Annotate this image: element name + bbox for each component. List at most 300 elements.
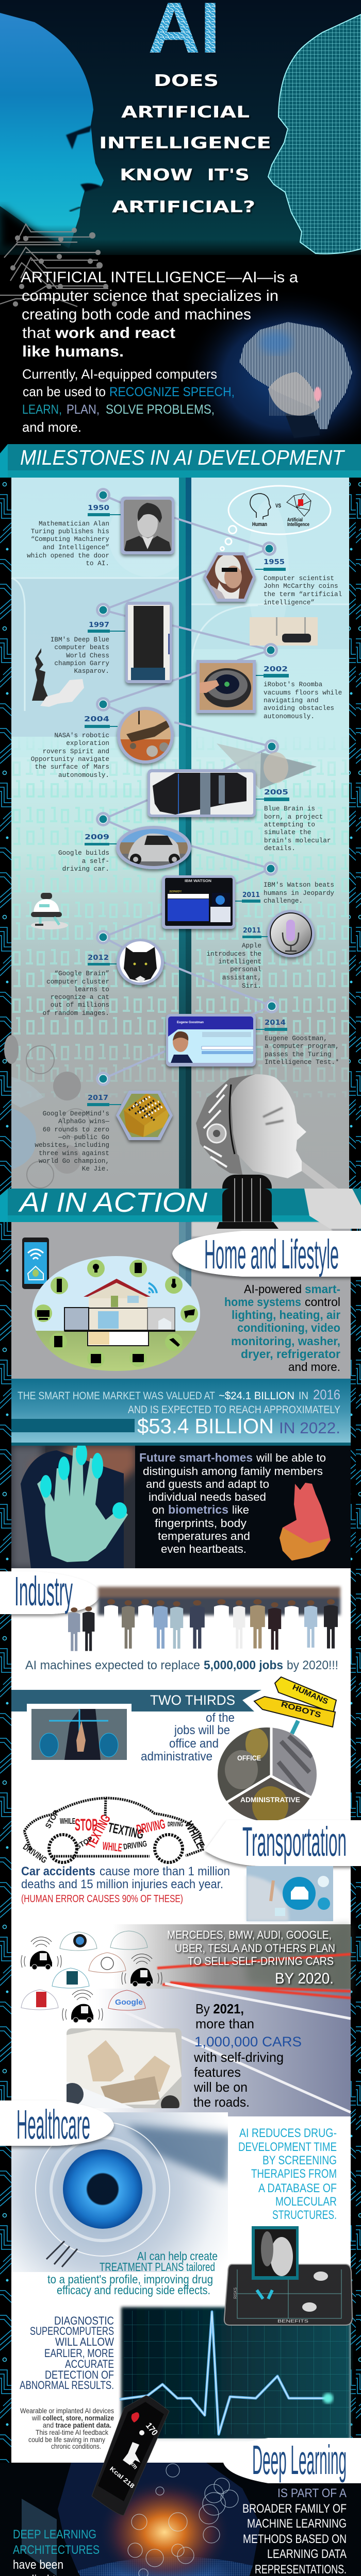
device icons bbox=[35, 1260, 198, 1367]
year: 2011 bbox=[242, 891, 260, 899]
title: DOES bbox=[154, 72, 219, 90]
connector lines bbox=[103, 495, 272, 1079]
tablet with risk benefit chart: RISKS bbox=[233, 2287, 238, 2299]
text: smart home systems: home systems bbox=[224, 1295, 301, 1309]
panel: smart home market: IN 2022. bbox=[279, 1419, 340, 1437]
bar bbox=[235, 900, 260, 903]
year: 2004 bbox=[84, 716, 109, 723]
item: 2014 Eugene Goostman bbox=[166, 999, 339, 1066]
text bbox=[31, 732, 109, 779]
title: ARTIFICIAL? bbox=[112, 198, 255, 216]
illustration: texting while driving word car: STOP bbox=[44, 1809, 61, 1830]
heading: milestones banner bbox=[0, 444, 361, 478]
text: of random images. bbox=[43, 1009, 109, 1017]
text: future smart homes: even heartbeats. bbox=[161, 1543, 247, 1555]
photo: black cat bbox=[117, 939, 164, 985]
text: out of millions bbox=[51, 1001, 109, 1009]
text: wearable devices: This real-time AI feedback bbox=[36, 2428, 109, 2436]
photo: John McCarthy bbox=[203, 552, 256, 602]
text: a self- bbox=[82, 857, 109, 865]
heading: Industry: Industry bbox=[14, 1568, 73, 1614]
text: Computer scientist bbox=[264, 574, 334, 582]
text: the term “artificial bbox=[264, 590, 342, 598]
text: smart home systems: and more. bbox=[288, 1360, 340, 1374]
text: Kasparov. bbox=[74, 667, 109, 675]
text: iRobot's Roomba bbox=[264, 681, 323, 688]
dot bbox=[262, 541, 276, 556]
text: brain's molecular bbox=[264, 837, 331, 844]
bar bbox=[256, 798, 289, 801]
text: car accidents: deaths and 15 million injuries each year. bbox=[21, 1877, 223, 1891]
text bbox=[27, 520, 109, 567]
panel: smart home market: THE SMART HOME MARKET WAS VALUED AT bbox=[18, 1390, 215, 1402]
panel: deep learning bbox=[0, 2396, 361, 2576]
decorative circles bbox=[4, 1035, 90, 1188]
dot bbox=[265, 739, 279, 754]
text: one million cars: will be on bbox=[193, 2079, 248, 2095]
logos: car brands: Google bbox=[115, 1998, 143, 2007]
screenshot: Eugene Goostman chatbot bbox=[166, 1014, 256, 1066]
bubbles bbox=[128, 2464, 238, 2576]
bar bbox=[255, 568, 286, 571]
text: drug development: A DATABASE OF bbox=[258, 2181, 337, 2195]
text: autonomously. bbox=[264, 713, 315, 720]
icon: code and face triangle bbox=[217, 743, 317, 789]
human versus AI labels: VS bbox=[275, 503, 281, 509]
panel: home and lifestyle bbox=[11, 1189, 361, 1379]
icon: fitness wristband bbox=[92, 2396, 169, 2515]
title: ARTIFICIAL bbox=[121, 103, 250, 122]
bar bbox=[256, 1028, 287, 1031]
text: to AI. bbox=[86, 560, 109, 567]
panel: self-driving road bbox=[11, 1924, 351, 2116]
illustration: anatomical heart bbox=[280, 1483, 331, 1561]
icon: wireframe head profile bbox=[268, 14, 361, 254]
heading band: two thirds: TWO THIRDS bbox=[150, 1692, 235, 1708]
text: future smart homes: individual needs based bbox=[149, 1490, 266, 1503]
year: 1950 bbox=[88, 504, 109, 512]
text: details. bbox=[264, 844, 296, 852]
bar bbox=[85, 725, 118, 728]
text: world Go champion, bbox=[39, 1157, 109, 1165]
text: wearable devices: chronic conditions. bbox=[51, 2442, 101, 2450]
text: one million cars: By 2021, bbox=[195, 2001, 244, 2016]
pie chart: job types: ADMINISTRATIVE bbox=[240, 1795, 300, 1804]
text: one million cars: more than bbox=[195, 2016, 254, 2031]
text: office and administrative: administrative bbox=[141, 1750, 212, 1764]
intro text: LEARN, bbox=[22, 402, 62, 417]
photo: hand with fingerprints bbox=[11, 1443, 136, 1568]
icon: fitness wristband: 170 bbox=[144, 2421, 160, 2437]
illustration: texting while driving word car: WHILE bbox=[183, 1819, 207, 1851]
photo: self-driving car interior bbox=[61, 2028, 182, 2114]
text bbox=[51, 636, 109, 675]
text: office and administrative bbox=[141, 1711, 235, 1764]
text bbox=[264, 805, 331, 852]
bar bbox=[256, 674, 289, 677]
photo: digital eye bbox=[11, 2112, 232, 2272]
illustration: thinking robot head bbox=[196, 1074, 338, 1229]
bar bbox=[87, 1103, 121, 1106]
text bbox=[264, 574, 342, 606]
dot bbox=[265, 999, 279, 1013]
text: Intelligence Test.* bbox=[265, 1058, 339, 1066]
text: Opportunity navigate bbox=[31, 755, 109, 763]
text: recognize a cat bbox=[51, 993, 109, 1001]
heading: AI in action banner: AI IN ACTION bbox=[18, 1187, 208, 1218]
panel: intro bbox=[0, 224, 361, 464]
text: smart home systems bbox=[224, 1282, 340, 1374]
photo: x-ray and pills tablet bbox=[224, 2226, 352, 2325]
text: future smart homes: will be able to bbox=[256, 1451, 326, 1464]
text: diagnostic supercomputers: SUPERCOMPUTERS bbox=[30, 2325, 114, 2337]
text: wearable devices bbox=[20, 2406, 114, 2450]
text: passes the Turing bbox=[265, 1050, 331, 1058]
panel: smart home market: IN bbox=[299, 1390, 308, 1402]
text: car accidents bbox=[21, 1865, 230, 1905]
chest x-ray bbox=[252, 2226, 299, 2280]
icons: self-driving cars bbox=[21, 1937, 162, 2023]
text: Eugene Goostman, bbox=[265, 1035, 327, 1042]
wifi signal bbox=[149, 1283, 157, 1293]
heading band: two thirds bbox=[11, 1690, 261, 1711]
text: office and administrative: office and bbox=[169, 1737, 219, 1751]
icon: chess pieces bbox=[32, 648, 84, 707]
text: the surface of Mars bbox=[35, 763, 109, 771]
text bbox=[265, 1035, 339, 1066]
text: diagnostic supercomputers: WILL ALLOW bbox=[55, 2335, 114, 2348]
dot bbox=[96, 930, 110, 944]
text: navigating and bbox=[264, 697, 319, 704]
text: one million cars: features bbox=[194, 2064, 241, 2080]
photo: scales robot versus human bbox=[27, 1704, 132, 1760]
text: Google builds bbox=[58, 849, 109, 857]
thought bubble bbox=[221, 486, 331, 550]
bar bbox=[88, 630, 125, 633]
decorative data streaks bbox=[22, 2499, 242, 2576]
item: 2005 Blue Brain bbox=[147, 739, 331, 852]
dot bbox=[96, 812, 110, 826]
text: treatment plans: to a patient's profile, improving drug bbox=[47, 2273, 213, 2286]
text: which opened the door bbox=[27, 552, 109, 560]
text: intelligent bbox=[218, 958, 261, 965]
text: Mathematician Alan bbox=[39, 520, 109, 528]
text: future smart homes: fingerprints, body bbox=[155, 1517, 247, 1530]
intro text: Currently, AI-equipped computers bbox=[22, 366, 217, 382]
text: avoiding obstacles bbox=[264, 704, 334, 712]
panel: smart home market: ~$24.1 BILLION bbox=[219, 1390, 294, 1402]
text: future smart homes: distinguish among family members bbox=[143, 1465, 323, 1478]
text: treatment plans bbox=[47, 2249, 218, 2297]
photo: Go board bbox=[116, 1091, 173, 1140]
panel: healthcare: Healthcare bbox=[17, 2102, 90, 2147]
intro text: RECOGNIZE SPEECH, bbox=[109, 385, 235, 399]
text: AlphaGo wins— bbox=[58, 1117, 109, 1125]
text: drug development: THERAPIES FROM bbox=[251, 2167, 337, 2181]
text: smart home systems: smart- bbox=[305, 1282, 340, 1296]
text: future smart homes: on bbox=[152, 1503, 165, 1516]
icon: humans and robots signpost: ROBOTS bbox=[280, 1700, 322, 1720]
text: automakers by 2020: BY 2020. bbox=[275, 1970, 334, 1987]
text: personal bbox=[230, 965, 261, 973]
text: wearable devices: will collect, store, normalize bbox=[31, 2414, 114, 2422]
text: automakers by 2020 bbox=[167, 1928, 335, 1987]
robot neck over banner bbox=[222, 1189, 272, 1227]
text: learns to bbox=[74, 986, 109, 993]
illustration: texting while driving word car: DRIVING bbox=[21, 1842, 49, 1865]
text: one million cars: the roads. bbox=[193, 2094, 250, 2110]
bar bbox=[88, 963, 117, 965]
illustration: texting while driving word car bbox=[21, 1798, 207, 1865]
text: car accidents: Car accidents bbox=[21, 1865, 95, 1878]
text: IBM's Watson beats bbox=[264, 881, 334, 889]
heading: Industry bbox=[0, 1568, 101, 1614]
year: 2002 bbox=[264, 666, 288, 673]
photo: supercomputer racks bbox=[147, 769, 256, 817]
icon: humans and robots signpost bbox=[254, 1677, 336, 1734]
item: 1997 Deep Blue bbox=[32, 602, 172, 707]
year: 2017 bbox=[88, 1094, 108, 1102]
human versus AI labels: Intelligence bbox=[287, 522, 309, 528]
item: 2002 Roomba bbox=[196, 617, 342, 720]
photo: Watson screen bbox=[162, 875, 235, 929]
text: diagnostic supercomputers: DETECTION OF bbox=[45, 2368, 114, 2381]
text: humans in Jeopardy bbox=[264, 889, 334, 897]
text bbox=[43, 970, 109, 1017]
panel: smart home market: $53.4 BILLION bbox=[137, 1414, 274, 1438]
text: “Computing Machinery bbox=[31, 535, 109, 543]
panel: smart home market: 2016 bbox=[313, 1387, 340, 1402]
text: smart home systems: conditioning, video bbox=[237, 1321, 340, 1334]
year: 2011 bbox=[243, 927, 261, 935]
text: future smart homes: temperatures and bbox=[158, 1530, 250, 1543]
text: diagnostic supercomputers bbox=[20, 2314, 114, 2392]
robot neck base bbox=[217, 1222, 278, 1229]
text: jobs replaced: AI machines expected to replace bbox=[25, 1658, 200, 1672]
photo: Alan Turing bbox=[121, 497, 174, 554]
text: John McCarthy coins bbox=[264, 582, 338, 590]
illustration: texting while driving word car: WHILE bbox=[102, 1839, 123, 1854]
title: KNOW IT'S bbox=[120, 166, 250, 184]
text: car accidents: (HUMAN ERROR CAUSES 90% OF THESE) bbox=[21, 1893, 183, 1905]
robot hand bbox=[304, 1189, 361, 1229]
icon: circuit brain with hand bbox=[239, 322, 352, 438]
text: one million cars bbox=[193, 2001, 302, 2110]
icon: fitness wristband: 4km bbox=[127, 2457, 139, 2470]
item: 2011 Watson bbox=[162, 861, 334, 929]
item: 2004 Mars rovers bbox=[31, 697, 174, 779]
title: INTELLIGENCE bbox=[99, 134, 271, 152]
intro text: ARTIFICIAL INTELLIGENCE—AI—is a bbox=[21, 269, 298, 286]
intro text: and more. bbox=[22, 419, 81, 435]
text: jobs replaced: 5,000,000 jobs bbox=[204, 1658, 283, 1672]
text: treatment plans: AI can help create bbox=[137, 2249, 218, 2263]
text: diagnostic supercomputers: DIAGNOSTIC bbox=[54, 2314, 114, 2327]
illustration: texting while driving word car: DRIVING bbox=[135, 1816, 167, 1837]
icon: smartphone bbox=[22, 1238, 49, 1289]
panel: healthcare bbox=[0, 2100, 352, 2463]
photo: robot vacuum on floor bbox=[250, 617, 318, 646]
text: “Google Brain” bbox=[54, 970, 109, 977]
text: jobs replaced: by 2020!!! bbox=[287, 1658, 338, 1672]
text: automakers by 2020: MERCEDES, BMW, AUDI, GOOGLE, bbox=[167, 1928, 332, 1941]
text: simulate the bbox=[264, 828, 311, 836]
text: automakers by 2020: UBER, TESLA AND OTHERS PLAN bbox=[175, 1942, 335, 1955]
text: computer beats bbox=[54, 643, 109, 651]
year: 2005 bbox=[264, 789, 288, 796]
house bbox=[64, 1279, 175, 1346]
tablet with risk benefit chart bbox=[224, 2264, 352, 2325]
bar bbox=[88, 513, 121, 516]
text: wearable devices: could be life saving in many bbox=[28, 2435, 105, 2444]
illustration: texting while driving word car: TEXTING bbox=[83, 1812, 113, 1851]
dot bbox=[264, 643, 278, 657]
intro text: like humans. bbox=[22, 343, 124, 360]
text bbox=[206, 942, 261, 990]
hero background bbox=[0, 0, 361, 260]
year: 1997 bbox=[89, 621, 109, 629]
icon: blue human head profile bbox=[0, 13, 104, 248]
text: champion Garry bbox=[54, 659, 109, 667]
photo: Deep Blue computer bbox=[125, 602, 172, 683]
text: future smart homes: and guests and adapt to bbox=[146, 1478, 269, 1490]
text: Apple bbox=[242, 942, 261, 950]
dot bbox=[96, 488, 110, 502]
text: born, a project bbox=[264, 813, 323, 821]
dot bbox=[96, 697, 110, 711]
text: wearable devices: Wearable or implanted AI devices bbox=[20, 2406, 114, 2415]
text: diagnostic supercomputers: ABNORMAL RESULTS. bbox=[20, 2379, 114, 2392]
text: websites, including bbox=[35, 1141, 109, 1149]
photo: Watson screen: IBM WATSON bbox=[185, 879, 211, 883]
text: NASA's robotic bbox=[54, 732, 109, 739]
text: future smart homes: like bbox=[232, 1503, 249, 1516]
panel: timeline bbox=[4, 478, 349, 1229]
text: diagnostic supercomputers: EARLIER, MORE bbox=[44, 2347, 114, 2360]
decorative circuit traces bbox=[0, 224, 117, 307]
text: one million cars: with self-driving bbox=[193, 2049, 284, 2065]
text: Google DeepMind's bbox=[43, 1110, 109, 1117]
text: drug development: BY SCREENING bbox=[262, 2154, 337, 2167]
panel: white content area bbox=[11, 1568, 351, 1947]
text: smart home systems: control bbox=[305, 1295, 340, 1309]
text: drug development: STRUCTURES. bbox=[272, 2208, 337, 2222]
panel: biometrics bbox=[11, 1443, 351, 1568]
year: 1955 bbox=[264, 558, 285, 566]
intro text: PLAN, bbox=[67, 402, 100, 417]
text: challenge. bbox=[264, 897, 303, 905]
intro text: can be used to bbox=[23, 384, 106, 399]
text: deep learning architectures bbox=[13, 2528, 106, 2576]
icon: humans and robots signpost: HUMANS bbox=[291, 1683, 330, 1706]
text: autonomously. bbox=[58, 771, 109, 779]
text bbox=[35, 1110, 109, 1173]
text: drug development: MOLECULAR bbox=[275, 2195, 337, 2209]
text: deep learning architectures: DEEP LEARNING bbox=[13, 2528, 96, 2541]
text: wearable devices: and trace patient data. bbox=[43, 2421, 111, 2429]
bar bbox=[242, 936, 268, 938]
side circuit panels bbox=[0, 478, 361, 2466]
photo: crowd of workers with missing figures bbox=[68, 1587, 340, 1651]
text: exploration bbox=[66, 739, 109, 747]
item: 2012 Google Brain bbox=[43, 930, 164, 1017]
year: 2012 bbox=[88, 954, 109, 962]
icon: cartoon robot bbox=[31, 893, 68, 929]
illustration: texting while driving word car: DRIVING bbox=[168, 1820, 183, 1828]
photo: Mars rover bbox=[117, 707, 174, 764]
panel: ECG monitor bbox=[120, 2307, 351, 2440]
bar bbox=[85, 843, 117, 845]
text: future smart homes: biometrics bbox=[168, 1503, 228, 1516]
text: one million cars: 1,000,000 CARS bbox=[194, 2034, 302, 2049]
intro text: computer science that specializes in bbox=[22, 287, 278, 304]
dot bbox=[96, 603, 110, 617]
human versus AI labels bbox=[252, 499, 309, 528]
text: Turing publishes his bbox=[31, 528, 109, 535]
text: IBM's Deep Blue bbox=[51, 636, 109, 643]
dot bbox=[96, 1072, 110, 1086]
text: attempting to bbox=[264, 821, 315, 828]
text: smart home systems: dryer, refrigerator bbox=[241, 1347, 340, 1361]
text: Siri. bbox=[242, 982, 261, 990]
text: computer cluster bbox=[46, 978, 109, 986]
intro text: that work and react bbox=[22, 325, 175, 342]
text: office and administrative: of the bbox=[206, 1711, 235, 1725]
item: 2017 AlphaGo bbox=[35, 1072, 173, 1173]
illustration: texting while driving word car: DRIVING bbox=[123, 1840, 147, 1852]
text: future smart homes bbox=[139, 1451, 326, 1555]
text: vacuums floors while bbox=[264, 689, 342, 697]
text: a computer program, bbox=[265, 1042, 339, 1050]
text: deep learning architectures: ARCHITECTURES bbox=[13, 2543, 100, 2557]
text: diagnostic supercomputers: ACCURATE bbox=[65, 2358, 114, 2370]
heading: Healthcare bbox=[0, 2100, 114, 2147]
text: future smart homes: Future smart-homes bbox=[139, 1451, 253, 1464]
intro text: SOLVE PROBLEMS, bbox=[106, 402, 215, 417]
title bbox=[99, 72, 271, 216]
text: and Intelligence” bbox=[43, 544, 109, 551]
text: treatment plans: TREATMENT PLANS tailored bbox=[100, 2260, 215, 2274]
illustration: texting while driving word car: STOP bbox=[75, 1816, 97, 1834]
text: drug development bbox=[238, 2126, 337, 2222]
human versus AI labels: Human bbox=[252, 521, 267, 528]
screenshot: Eugene Goostman chatbot: Eugene Goostman bbox=[177, 1021, 204, 1024]
text bbox=[58, 849, 109, 873]
year: 2014 bbox=[265, 1019, 286, 1027]
photo: Watson screen: JEOPARDY! bbox=[169, 890, 182, 893]
intro text bbox=[21, 269, 298, 435]
tablet with risk benefit chart: BENEFITS bbox=[277, 2319, 308, 2324]
pie chart: job types bbox=[218, 1727, 317, 1825]
heading: AI in action banner bbox=[0, 1187, 361, 1222]
text: assistant, bbox=[222, 974, 261, 981]
text: driving car. bbox=[62, 865, 109, 873]
text: treatment plans: efficacy and reducing side effects. bbox=[57, 2283, 210, 2297]
intro text: creating both code and machines bbox=[22, 306, 251, 323]
illustration: texting while driving word car: WHILE bbox=[60, 1817, 75, 1826]
pie labels: OFFICE bbox=[237, 1754, 261, 1762]
photo: Roomba bbox=[196, 660, 256, 713]
text: World Chess bbox=[66, 652, 109, 659]
text: introduces the bbox=[206, 950, 261, 958]
text: drug development: AI REDUCES DRUG- bbox=[239, 2126, 337, 2140]
text: Ke Jie. bbox=[82, 1165, 109, 1173]
human versus AI labels: Artificial bbox=[287, 517, 303, 523]
illustration: texting while driving word car: STOP bbox=[74, 1835, 94, 1851]
text: automakers by 2020: TO SELL SELF-DRIVING CARS bbox=[188, 1955, 334, 1968]
text: smart home systems: monitoring, washer, bbox=[231, 1334, 340, 1348]
logos: car brands bbox=[21, 1931, 147, 2010]
